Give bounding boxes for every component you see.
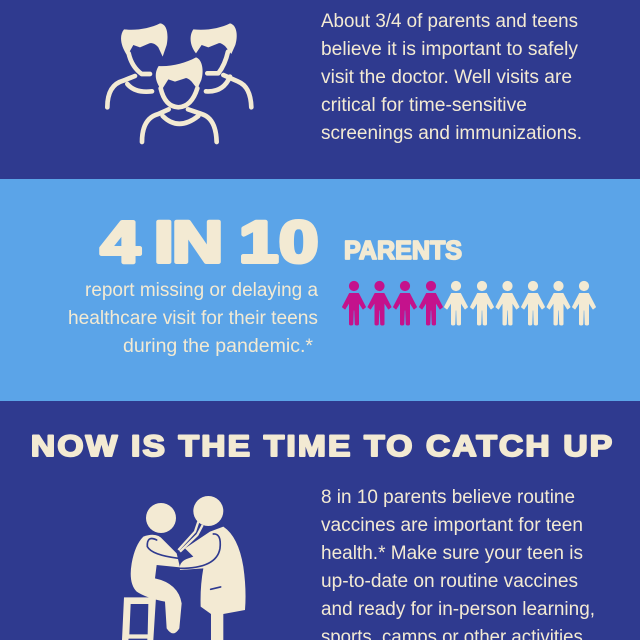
icon: doctor examining patient (122, 496, 246, 640)
panel: bottom dark blue (0, 401, 640, 640)
text: routine vaccines: 8 in 10 parents believe routine (321, 487, 575, 508)
text: routine vaccines (321, 487, 595, 640)
text: missing or delaying (68, 280, 318, 357)
panel: light blue statistic (0, 179, 640, 401)
pictogram: 4 of 10 people (342, 281, 596, 325)
panel: top dark blue (0, 0, 640, 179)
text: routine vaccines: and ready for in-person learning, (321, 599, 595, 620)
text: routine vaccines: health.* Make sure your teen is (321, 543, 583, 564)
text: missing or delaying: during the pandemic.* (123, 336, 314, 357)
people not highlighted (444, 281, 596, 325)
heading: parents: PARENTS (344, 235, 462, 265)
text: well visits (321, 11, 582, 144)
heading: catch up: NOW IS THE TIME TO CATCH UP (31, 429, 612, 463)
text: well visits: critical for time-sensitive (321, 95, 527, 116)
text: missing or delaying: report missing or delaying a (85, 280, 318, 301)
people highlighted (342, 281, 442, 325)
text: routine vaccines: vaccines are important for teen (321, 515, 583, 536)
text: well visits: visit the doctor. Well visits are (321, 67, 572, 88)
text: routine vaccines: up-to-date on routine vaccines (321, 571, 578, 592)
icon: three parents and teens (107, 23, 251, 142)
text: well visits: believe it is important to safely (321, 39, 578, 60)
heading: 4 in 10: 4 IN 10 (101, 209, 318, 275)
text: missing or delaying: healthcare visit for their teens (68, 308, 318, 329)
text: well visits: About 3/4 of parents and teens (321, 11, 578, 32)
text: well visits: screenings and immunizations. (321, 123, 582, 144)
